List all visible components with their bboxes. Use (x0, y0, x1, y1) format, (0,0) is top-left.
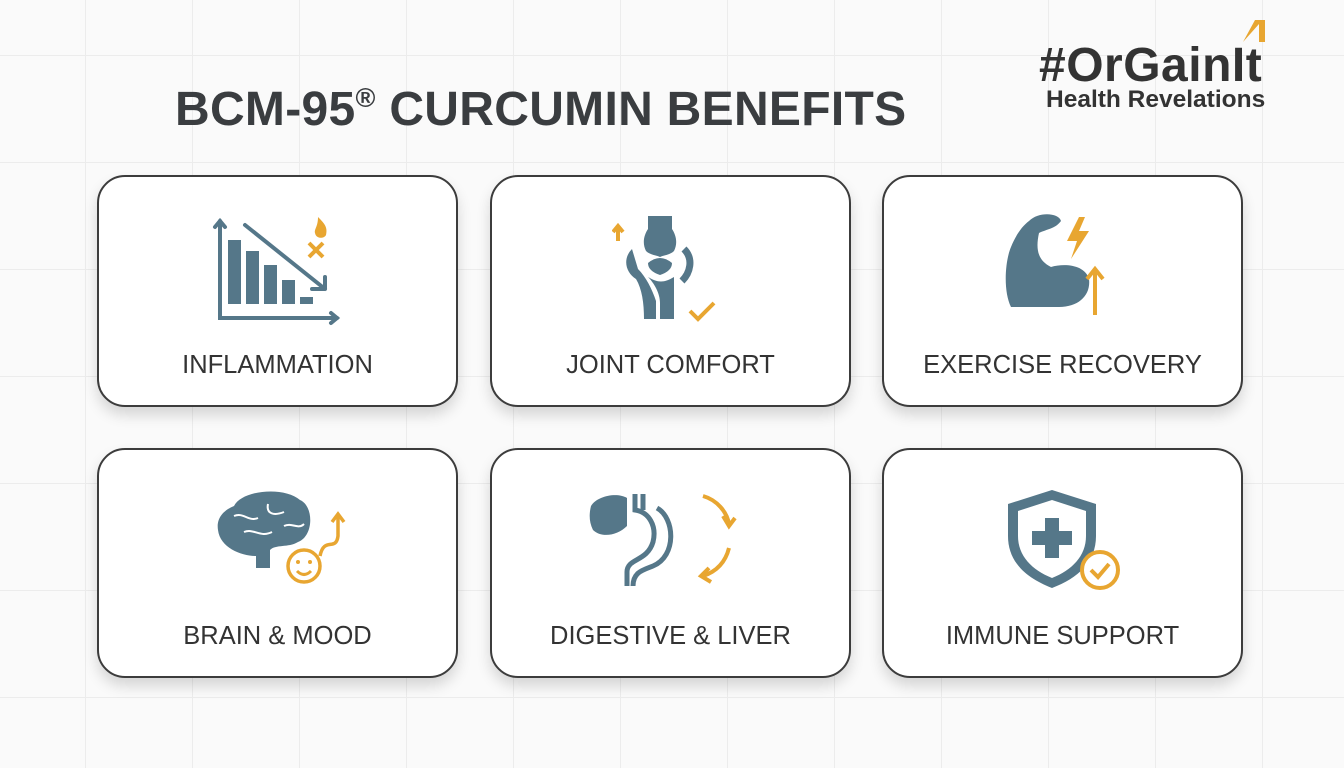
panel: inflammation (97, 175, 458, 407)
panel: joint comfort: JOINT COMFORT (566, 351, 775, 379)
panel: inflammation: INFLAMMATION (182, 351, 373, 379)
icon: joint (612, 216, 716, 322)
panel: immune support (882, 448, 1243, 678)
panel: digestive & liver (490, 448, 851, 678)
panel: exercise recovery: EXERCISE RECOVERY (923, 351, 1202, 379)
logo: Health Revelations (1046, 86, 1265, 113)
icon: flexed arm (1006, 214, 1104, 315)
panel: brain & mood (97, 448, 458, 678)
icon: brain and smiley (218, 492, 346, 584)
panel: joint comfort (490, 175, 851, 407)
icon: shield (1008, 490, 1120, 590)
logo arrow (1243, 20, 1265, 42)
title: BCM-95® CURCUMIN BENEFITS (175, 83, 906, 136)
panel: digestive & liver: DIGESTIVE & LIVER (550, 622, 791, 650)
icon: liver and stomach (590, 494, 736, 586)
icon: declining bars (212, 217, 340, 326)
panel: immune support: IMMUNE SUPPORT (946, 622, 1179, 650)
logo (1039, 20, 1265, 113)
logo: #OrGainIt (1039, 39, 1262, 92)
panel: exercise recovery (882, 175, 1243, 407)
panel: brain & mood: BRAIN & MOOD (183, 622, 372, 650)
